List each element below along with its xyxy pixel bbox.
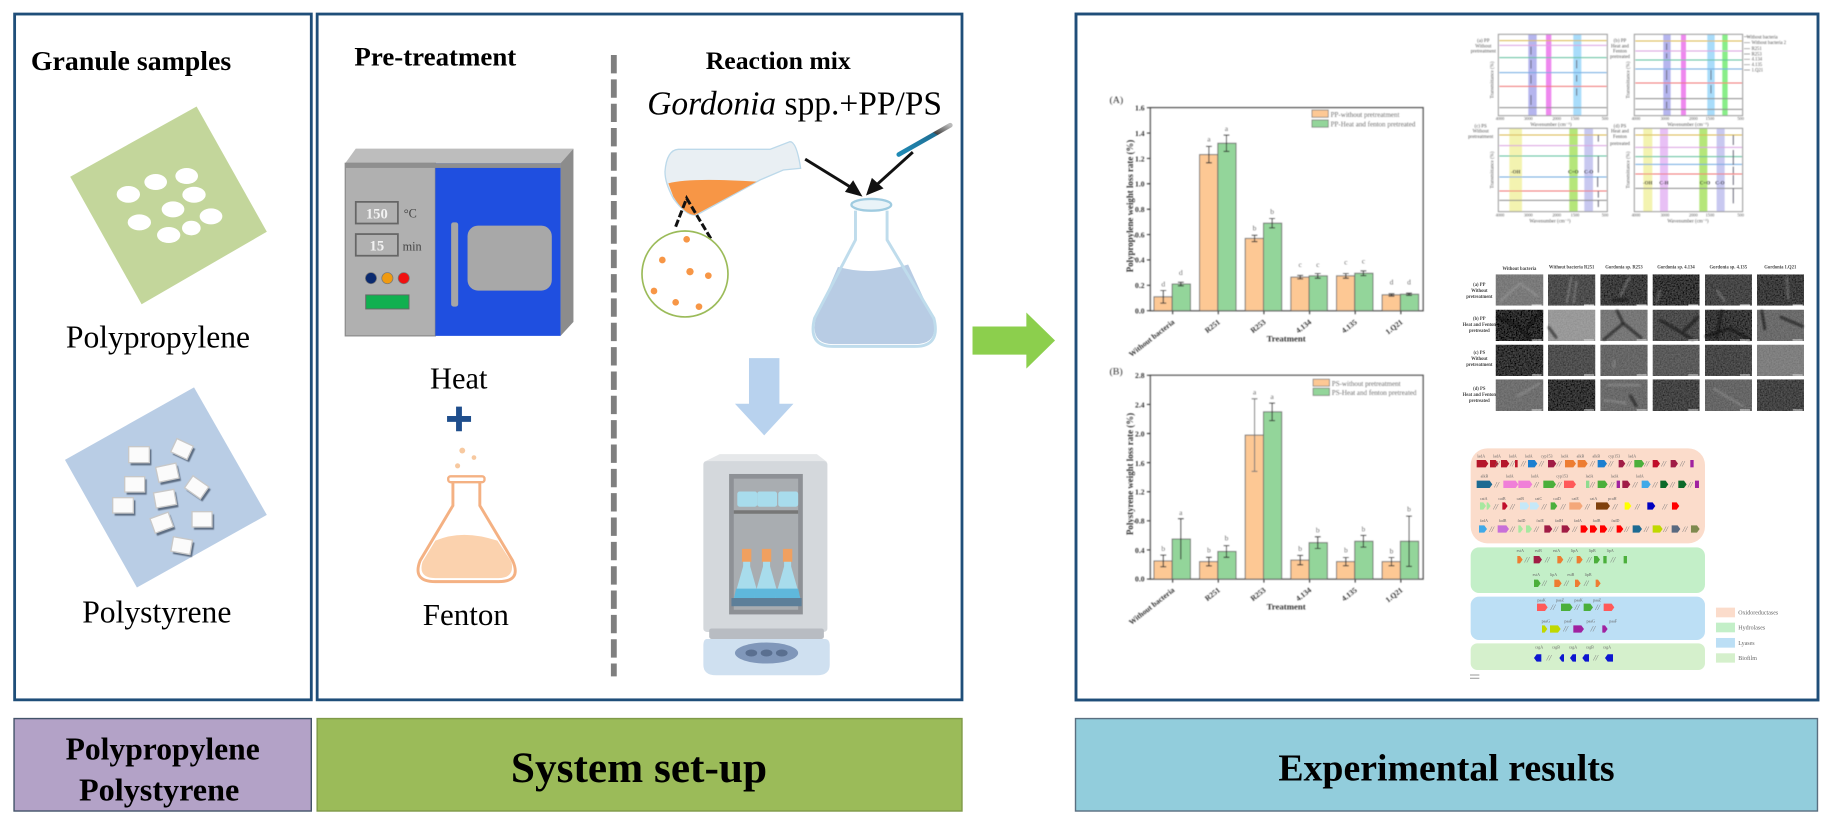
bar chart: polystyrene weight loss: Treatment xyxy=(1267,602,1306,612)
heading: reaction mix: Reaction mix xyxy=(706,46,851,75)
icon: pipette xyxy=(899,125,950,154)
diagram: gene clusters by enzyme class: // xyxy=(1632,480,1638,489)
bar chart: polypropylene weight loss: b xyxy=(1253,224,1257,233)
chart: FTIR spectra: 3000 xyxy=(1661,116,1669,121)
chart: FTIR spectra: Wavenumber (cm⁻¹) xyxy=(1530,122,1572,128)
chart: FTIR spectra: 2000 xyxy=(1552,116,1561,121)
diagram: gene clusters by enzyme class: // xyxy=(1586,556,1592,565)
diagram: gene clusters by enzyme class: // xyxy=(1541,502,1547,511)
bar chart: polypropylene weight loss: 0.6 xyxy=(1135,231,1145,240)
image grid: SEM micrographs: Heat and Fenton xyxy=(1463,393,1496,398)
diagram: gene clusters by enzyme class: // xyxy=(1607,460,1614,469)
chart: FTIR spectra: C=O xyxy=(1700,182,1710,187)
bar chart: polypropylene weight loss: R251 xyxy=(1203,317,1222,335)
chart: FTIR spectra: 4.135 xyxy=(1752,63,1763,68)
icon: polystyrene granule sheet xyxy=(65,387,267,587)
chart: FTIR spectra: C-O xyxy=(1584,170,1593,175)
bar chart: polystyrene weight loss: b xyxy=(1225,534,1229,543)
bar chart: polystyrene weight loss: 2.4 xyxy=(1135,400,1145,409)
chart: FTIR spectra: 3000 xyxy=(1524,116,1533,121)
chart: FTIR spectra: 1500 xyxy=(1571,116,1579,121)
chart: FTIR spectra xyxy=(1468,34,1787,225)
diagram: gene clusters by enzyme class: // xyxy=(1660,460,1667,469)
diagram: gene clusters by enzyme class: paaG paaF paaG paaF xyxy=(1542,619,1618,624)
label bar: system set-up xyxy=(317,719,962,811)
bar chart: polystyrene weight loss: b xyxy=(1298,544,1302,553)
panel: experimental results xyxy=(1076,14,1818,700)
bar chart: polypropylene weight loss: PP-without pretreatment xyxy=(1331,111,1399,119)
diagram: gene clusters by enzyme class: // xyxy=(1524,556,1530,565)
chart: FTIR spectra: Without bacteria xyxy=(1747,35,1778,40)
chart: FTIR spectra: 3000 xyxy=(1661,213,1669,218)
chart: FTIR spectra: 4000 xyxy=(1496,116,1504,121)
label bar: polypropylene polystyrene: Polypropylene xyxy=(66,732,260,767)
bar chart: polypropylene weight loss: 1.4 xyxy=(1135,129,1145,138)
image grid: SEM micrographs: Without xyxy=(1471,289,1488,294)
chart: FTIR spectra: 500 xyxy=(1602,213,1608,218)
label: polystyrene: Polystyrene xyxy=(82,595,231,630)
image grid: SEM micrographs: pretreatment xyxy=(1466,295,1493,300)
image grid: SEM micrographs: Without bacteria R251 xyxy=(1549,266,1595,271)
chart: FTIR spectra: 1500 xyxy=(1706,116,1714,121)
bar chart: polypropylene weight loss xyxy=(1109,95,1423,359)
bar chart: polystyrene weight loss: 4.134 xyxy=(1294,585,1313,603)
image grid: SEM micrographs: Without bacteria xyxy=(1502,267,1537,272)
diagram: gene clusters by enzyme class: // xyxy=(1608,480,1615,489)
bar chart: polypropylene weight loss: c xyxy=(1344,257,1348,266)
bar chart: polypropylene weight loss: c xyxy=(1362,256,1366,265)
bar chart: polystyrene weight loss: PS-Heat and fenton pretreated xyxy=(1332,389,1417,397)
diagram: gene clusters by enzyme class: Hydrolases xyxy=(1738,626,1766,632)
bar chart: polypropylene weight loss: c xyxy=(1299,260,1303,269)
arrow: green result arrow xyxy=(973,312,1055,369)
bar chart: polystyrene weight loss: (B) xyxy=(1109,366,1123,377)
diagram: gene clusters by enzyme class: // xyxy=(1652,480,1658,489)
image grid: SEM micrographs: pretreated xyxy=(1469,399,1490,404)
diagram: gene clusters by enzyme class xyxy=(1470,448,1779,678)
diagram: gene clusters by enzyme class: // xyxy=(1541,579,1547,588)
chart: FTIR spectra: Wavenumber (cm⁻¹) xyxy=(1667,122,1709,128)
chart: FTIR spectra: Transmittance (%) xyxy=(1490,61,1495,99)
chart: FTIR spectra: Without xyxy=(1475,44,1492,49)
diagram: gene clusters by enzyme class: Lyases xyxy=(1738,641,1755,647)
icon: oven xyxy=(345,149,573,336)
chart: FTIR spectra: 500 xyxy=(1737,213,1744,218)
bar chart: polypropylene weight loss: 4.134 xyxy=(1294,317,1313,335)
panel: system set-up xyxy=(317,14,962,700)
label bar: polypropylene polystyrene: Polystyrene xyxy=(79,771,239,807)
chart: FTIR spectra: Wavenumber (cm⁻¹) xyxy=(1667,219,1709,225)
icon: tilted culture flask with magnified bacteria xyxy=(642,142,801,317)
icon: oven: min xyxy=(403,239,422,253)
diagram: gene clusters by enzyme class: // xyxy=(1562,624,1569,633)
label bar: experimental results: Experimental results xyxy=(1278,748,1615,790)
diagram: gene clusters by enzyme class: // xyxy=(1566,556,1573,565)
divider: dashed line xyxy=(611,55,616,676)
diagram: gene clusters by enzyme class: csgA csgB csgA csgB csgA xyxy=(1535,644,1611,649)
bar chart: polystyrene weight loss: PS-without pretreatment xyxy=(1332,380,1401,388)
chart: FTIR spectra: 4000 xyxy=(1632,116,1640,121)
diagram: gene clusters by enzyme class: // xyxy=(1574,603,1580,612)
chart: FTIR spectra: 4000 xyxy=(1632,213,1640,218)
image grid: SEM micrographs: Without xyxy=(1471,357,1488,362)
bar chart: polystyrene weight loss: 1.6 xyxy=(1135,459,1145,468)
diagram: gene clusters by enzyme class: // xyxy=(1509,502,1515,511)
diagram: gene clusters by enzyme class: // xyxy=(1563,579,1569,588)
chart: FTIR spectra: Heat and xyxy=(1611,130,1629,135)
bar chart: polystyrene weight loss: a xyxy=(1179,508,1183,517)
diagram: gene clusters by enzyme class: // xyxy=(1634,502,1640,511)
diagram: gene clusters by enzyme class: estA lipA estB lipB xyxy=(1533,572,1592,577)
diagram: gene clusters by enzyme class: // xyxy=(1594,603,1601,612)
bar chart: polypropylene weight loss: 0.2 xyxy=(1135,281,1145,290)
diagram: gene clusters by enzyme class: // xyxy=(1583,579,1589,588)
chart: FTIR spectra: pretreatment xyxy=(1468,135,1494,140)
label: heat: Heat xyxy=(430,362,488,396)
chart: FTIR spectra: (a) PP xyxy=(1477,39,1490,44)
chart: FTIR spectra: 4.134 xyxy=(1752,58,1763,63)
diagram: gene clusters by enzyme class: // xyxy=(1589,480,1595,489)
chart: FTIR spectra: R253 xyxy=(1752,52,1762,57)
diagram: gene clusters by enzyme class: // xyxy=(1556,480,1562,489)
diagram: gene clusters by enzyme class: // xyxy=(1589,460,1595,469)
diagram: gene clusters by enzyme class: // xyxy=(1592,654,1599,663)
diagram: gene clusters by enzyme class: // xyxy=(1560,502,1566,511)
diagram: gene clusters by enzyme class: // xyxy=(1546,654,1552,663)
bar chart: polypropylene weight loss: (A) xyxy=(1109,95,1123,106)
diagram: gene clusters by enzyme class: // xyxy=(1494,460,1500,469)
image grid: SEM micrographs: pretreatment xyxy=(1466,363,1493,368)
diagram: gene clusters by enzyme class: // xyxy=(1687,480,1693,489)
icon: oven: 15 xyxy=(370,238,384,254)
bar chart: polypropylene weight loss: 4.135 xyxy=(1340,317,1359,335)
diagram: gene clusters by enzyme class: // xyxy=(1509,460,1515,469)
label: Fenton: Fenton xyxy=(423,597,509,632)
chart: FTIR spectra: R251 xyxy=(1752,47,1762,52)
diagram: gene clusters by enzyme class: // xyxy=(1533,480,1539,489)
chart: FTIR spectra: Without bacteria 2 xyxy=(1752,41,1787,46)
image grid: SEM micrographs xyxy=(1463,266,1804,411)
bar chart: polypropylene weight loss: 1.0 xyxy=(1135,180,1145,189)
bar chart: polypropylene weight loss: a xyxy=(1207,135,1211,144)
diagram: gene clusters by enzyme class: // xyxy=(1488,525,1495,534)
diagram: gene clusters by enzyme class: Biofilm xyxy=(1738,655,1757,662)
bar chart: polystyrene weight loss: 4.135 xyxy=(1340,585,1359,603)
bar chart: polystyrene weight loss: b xyxy=(1344,545,1348,554)
chart: FTIR spectra: -OH xyxy=(1643,182,1652,187)
diagram: gene clusters by enzyme class: // xyxy=(1662,525,1669,534)
bar chart: polystyrene weight loss: R253 xyxy=(1249,585,1268,603)
image grid: SEM micrographs: Gordonia sp. 4.135 xyxy=(1710,266,1748,271)
image grid: SEM micrographs: (a) PP xyxy=(1473,283,1486,288)
chart: FTIR spectra: Transmittance (%) xyxy=(1490,151,1495,189)
bar chart: polystyrene weight loss: b xyxy=(1390,547,1394,556)
label: polypropylene: Polypropylene xyxy=(66,320,250,355)
diagram: gene clusters by enzyme class: Oxidoreductases xyxy=(1738,610,1779,616)
image grid: SEM micrographs: Heat and Fenton xyxy=(1463,323,1496,328)
bar chart: polypropylene weight loss: 1.Q21 xyxy=(1384,317,1405,336)
diagram: gene clusters by enzyme class: // xyxy=(1533,525,1539,534)
chart: FTIR spectra: pretreated xyxy=(1610,55,1630,60)
diagram: gene clusters by enzyme class: // xyxy=(1509,525,1515,534)
chart: FTIR spectra: (d) PS xyxy=(1614,124,1627,129)
image grid: SEM micrographs: Gordonia sp. R253 xyxy=(1605,266,1643,271)
chart: FTIR spectra: pretreated xyxy=(1610,142,1630,147)
bar chart: polystyrene weight loss: b xyxy=(1316,525,1320,534)
chart: FTIR spectra: C=O xyxy=(1568,170,1579,175)
bar chart: polystyrene weight loss: 0.0 xyxy=(1135,575,1145,584)
bar chart: polystyrene weight loss: Without bacteria xyxy=(1127,585,1176,627)
bar chart: polypropylene weight loss: 1.2 xyxy=(1135,155,1145,164)
chart: FTIR spectra: Fenton xyxy=(1613,135,1627,140)
bar chart: polystyrene weight loss: 0.4 xyxy=(1135,546,1145,555)
image grid: SEM micrographs: (b) PP xyxy=(1473,317,1486,322)
bar chart: polypropylene weight loss: Treatment xyxy=(1267,334,1306,344)
bar chart: polypropylene weight loss: PP-Heat and fenton pretreated xyxy=(1331,120,1416,128)
bar chart: polystyrene weight loss: b xyxy=(1407,504,1411,513)
bar chart: polystyrene weight loss: 2.0 xyxy=(1135,430,1145,439)
diagram: gene clusters by enzyme class: // xyxy=(1584,502,1590,511)
chart: FTIR spectra: 1.Q21 xyxy=(1752,68,1764,73)
label bar: polypropylene polystyrene xyxy=(14,719,311,811)
bar chart: polystyrene weight loss: a xyxy=(1270,392,1274,401)
diagram: gene clusters by enzyme class: // xyxy=(1682,525,1688,534)
chart: FTIR spectra: 2000 xyxy=(1689,116,1698,121)
diagram: gene clusters by enzyme class: // xyxy=(1550,603,1556,612)
image grid: SEM micrographs: Gordonia sp. 4.134 xyxy=(1657,266,1695,271)
bar chart: polystyrene weight loss: Polystyrene weight loss rate (%) xyxy=(1125,413,1135,535)
diagram: gene clusters by enzyme class: ladA ladA ladA ladA cyp153 ladA alkB alkB cyp153 ladA xyxy=(1477,454,1636,459)
bar chart: polystyrene weight loss: b xyxy=(1161,544,1165,553)
diagram: gene clusters by enzyme class: // xyxy=(1679,460,1685,469)
bar chart: polypropylene weight loss: b xyxy=(1270,207,1274,216)
bar chart: polystyrene weight loss: 1.Q21 xyxy=(1384,585,1405,604)
icon: oven: °C xyxy=(404,207,417,221)
chart: FTIR spectra: C-H xyxy=(1659,182,1669,187)
chart: FTIR spectra: 2000 xyxy=(1552,213,1561,218)
icon: shaking incubator xyxy=(703,454,830,675)
diagram: gene clusters by enzyme class: // xyxy=(1544,556,1550,565)
bar chart: polypropylene weight loss: 0.0 xyxy=(1135,307,1145,316)
chart: FTIR spectra: Wavenumber (cm⁻¹) xyxy=(1529,219,1571,225)
diagram: gene clusters by enzyme class: paaK paaZ paaK paaZ xyxy=(1537,597,1602,602)
bar chart: polypropylene weight loss: 1.6 xyxy=(1135,104,1145,113)
bar chart: polystyrene weight loss: 2.8 xyxy=(1135,371,1145,380)
diagram: gene clusters by enzyme class: // xyxy=(1552,525,1559,534)
diagram: gene clusters by enzyme class: // xyxy=(1626,460,1632,469)
bar chart: polypropylene weight loss: d xyxy=(1407,277,1411,286)
chart: FTIR spectra: C-O xyxy=(1715,182,1725,187)
icon: Erlenmeyer flask with liquid xyxy=(813,199,935,346)
diagram: gene clusters by enzyme class: fadA fadB fadD fadE fadH fadA fadB fadD xyxy=(1480,518,1619,523)
bar chart: polypropylene weight loss: Without bacteria xyxy=(1127,317,1176,359)
chart: FTIR spectra: 3000 xyxy=(1524,213,1533,218)
chart: FTIR spectra: Heat and xyxy=(1611,44,1629,49)
panel: granule samples xyxy=(15,14,311,700)
bar chart: polystyrene weight loss: b xyxy=(1362,524,1366,533)
diagram: gene clusters by enzyme class: catA catB catB catC catD catE catA pcaH xyxy=(1480,496,1617,501)
diagram: gene clusters by enzyme class: // xyxy=(1612,502,1618,511)
text: Gordonia spp. + PP/PS: Gordonia spp.+PP/PS xyxy=(647,86,942,123)
icon: plus sign xyxy=(447,407,471,431)
bar chart: polypropylene weight loss: a xyxy=(1225,124,1229,133)
image grid: SEM micrographs: pretreated xyxy=(1469,329,1490,334)
bar chart: polystyrene weight loss xyxy=(1109,366,1423,627)
chart: FTIR spectra: 500 xyxy=(1737,116,1744,121)
chart: FTIR spectra: 500 xyxy=(1602,116,1608,121)
diagram: gene clusters by enzyme class: alkB ladA ladA cyp153 ladA ladA ladA xyxy=(1481,473,1644,478)
label bar: experimental results xyxy=(1076,719,1817,811)
bar chart: polypropylene weight loss: c xyxy=(1316,260,1320,269)
icon: oven: 150 xyxy=(366,206,388,222)
chart: FTIR spectra: 2000 xyxy=(1689,213,1698,218)
arrow: light blue down arrow xyxy=(735,358,793,435)
diagram: gene clusters by enzyme class: // xyxy=(1538,460,1544,469)
chart: FTIR spectra: 4000 xyxy=(1496,213,1504,218)
diagram: gene clusters by enzyme class: // xyxy=(1661,502,1668,511)
bar chart: polystyrene weight loss: R251 xyxy=(1203,585,1222,603)
bar chart: polystyrene weight loss: 1.2 xyxy=(1135,487,1145,496)
diagram: gene clusters by enzyme class: // xyxy=(1492,502,1499,511)
image grid: SEM micrographs: (d) PS xyxy=(1473,387,1486,392)
bar chart: polypropylene weight loss: d xyxy=(1161,280,1165,289)
diagram: gene clusters by enzyme class: estA estB estA lipA lipB lipA xyxy=(1517,548,1614,553)
label bar: system set-up: System set-up xyxy=(511,744,767,792)
diagram: gene clusters by enzyme class: // xyxy=(1520,460,1526,469)
diagram: gene clusters by enzyme class: // xyxy=(1556,460,1562,469)
bar chart: polypropylene weight loss: 0.8 xyxy=(1135,205,1145,214)
diagram: gene clusters by enzyme class: // xyxy=(1669,480,1675,489)
image grid: SEM micrographs: Gordonia 1.Q21 xyxy=(1764,266,1797,271)
diagram: gene clusters by enzyme class: // xyxy=(1643,460,1650,469)
heading: pre-treatment: Pre-treatment xyxy=(354,42,516,72)
bar chart: polystyrene weight loss: 0.8 xyxy=(1135,517,1145,526)
chart: FTIR spectra: (c) PS xyxy=(1475,124,1487,129)
icon: Fenton flask xyxy=(418,448,515,582)
diagram: gene clusters by enzyme class: // xyxy=(1493,480,1500,489)
bar chart: polystyrene weight loss: b xyxy=(1207,545,1211,554)
chart: FTIR spectra: Transmittance (%) xyxy=(1626,151,1631,189)
diagram: gene clusters by enzyme class: // xyxy=(1590,624,1596,633)
arrows: inoculation into flask xyxy=(805,152,913,197)
bar chart: polypropylene weight loss: R253 xyxy=(1249,317,1268,335)
bar chart: polypropylene weight loss: Polypropylene weight loss rate (%) xyxy=(1125,140,1135,272)
chart: FTIR spectra: 1500 xyxy=(1571,213,1579,218)
bar chart: polypropylene weight loss: 0.4 xyxy=(1135,256,1145,265)
diagram: gene clusters by enzyme class: // xyxy=(1571,525,1578,534)
diagram: gene clusters by enzyme class: // xyxy=(1607,525,1614,534)
bar chart: polypropylene weight loss: d xyxy=(1390,277,1394,286)
icon: polypropylene granule sheet xyxy=(70,106,267,304)
diagram: gene clusters by enzyme class: // xyxy=(1643,525,1649,534)
heading: granule samples: Granule samples xyxy=(31,46,231,77)
chart: FTIR spectra: Fenton xyxy=(1613,50,1627,55)
diagram: gene clusters by enzyme class: // xyxy=(1623,525,1630,534)
diagram: gene clusters by enzyme class: // xyxy=(1610,556,1616,565)
chart: FTIR spectra: Without xyxy=(1473,130,1489,135)
bar chart: polypropylene weight loss: d xyxy=(1179,268,1183,277)
chart: FTIR spectra: -OH xyxy=(1511,170,1520,175)
bar chart: polystyrene weight loss: a xyxy=(1253,387,1257,396)
chart: FTIR spectra: (b) PP xyxy=(1614,39,1627,44)
chart: FTIR spectra: Transmittance (%) xyxy=(1626,61,1631,99)
chart: FTIR spectra: 1500 xyxy=(1706,213,1714,218)
chart: FTIR spectra: pretreatment xyxy=(1471,50,1497,55)
image grid: SEM micrographs: (c) PS xyxy=(1473,351,1486,356)
